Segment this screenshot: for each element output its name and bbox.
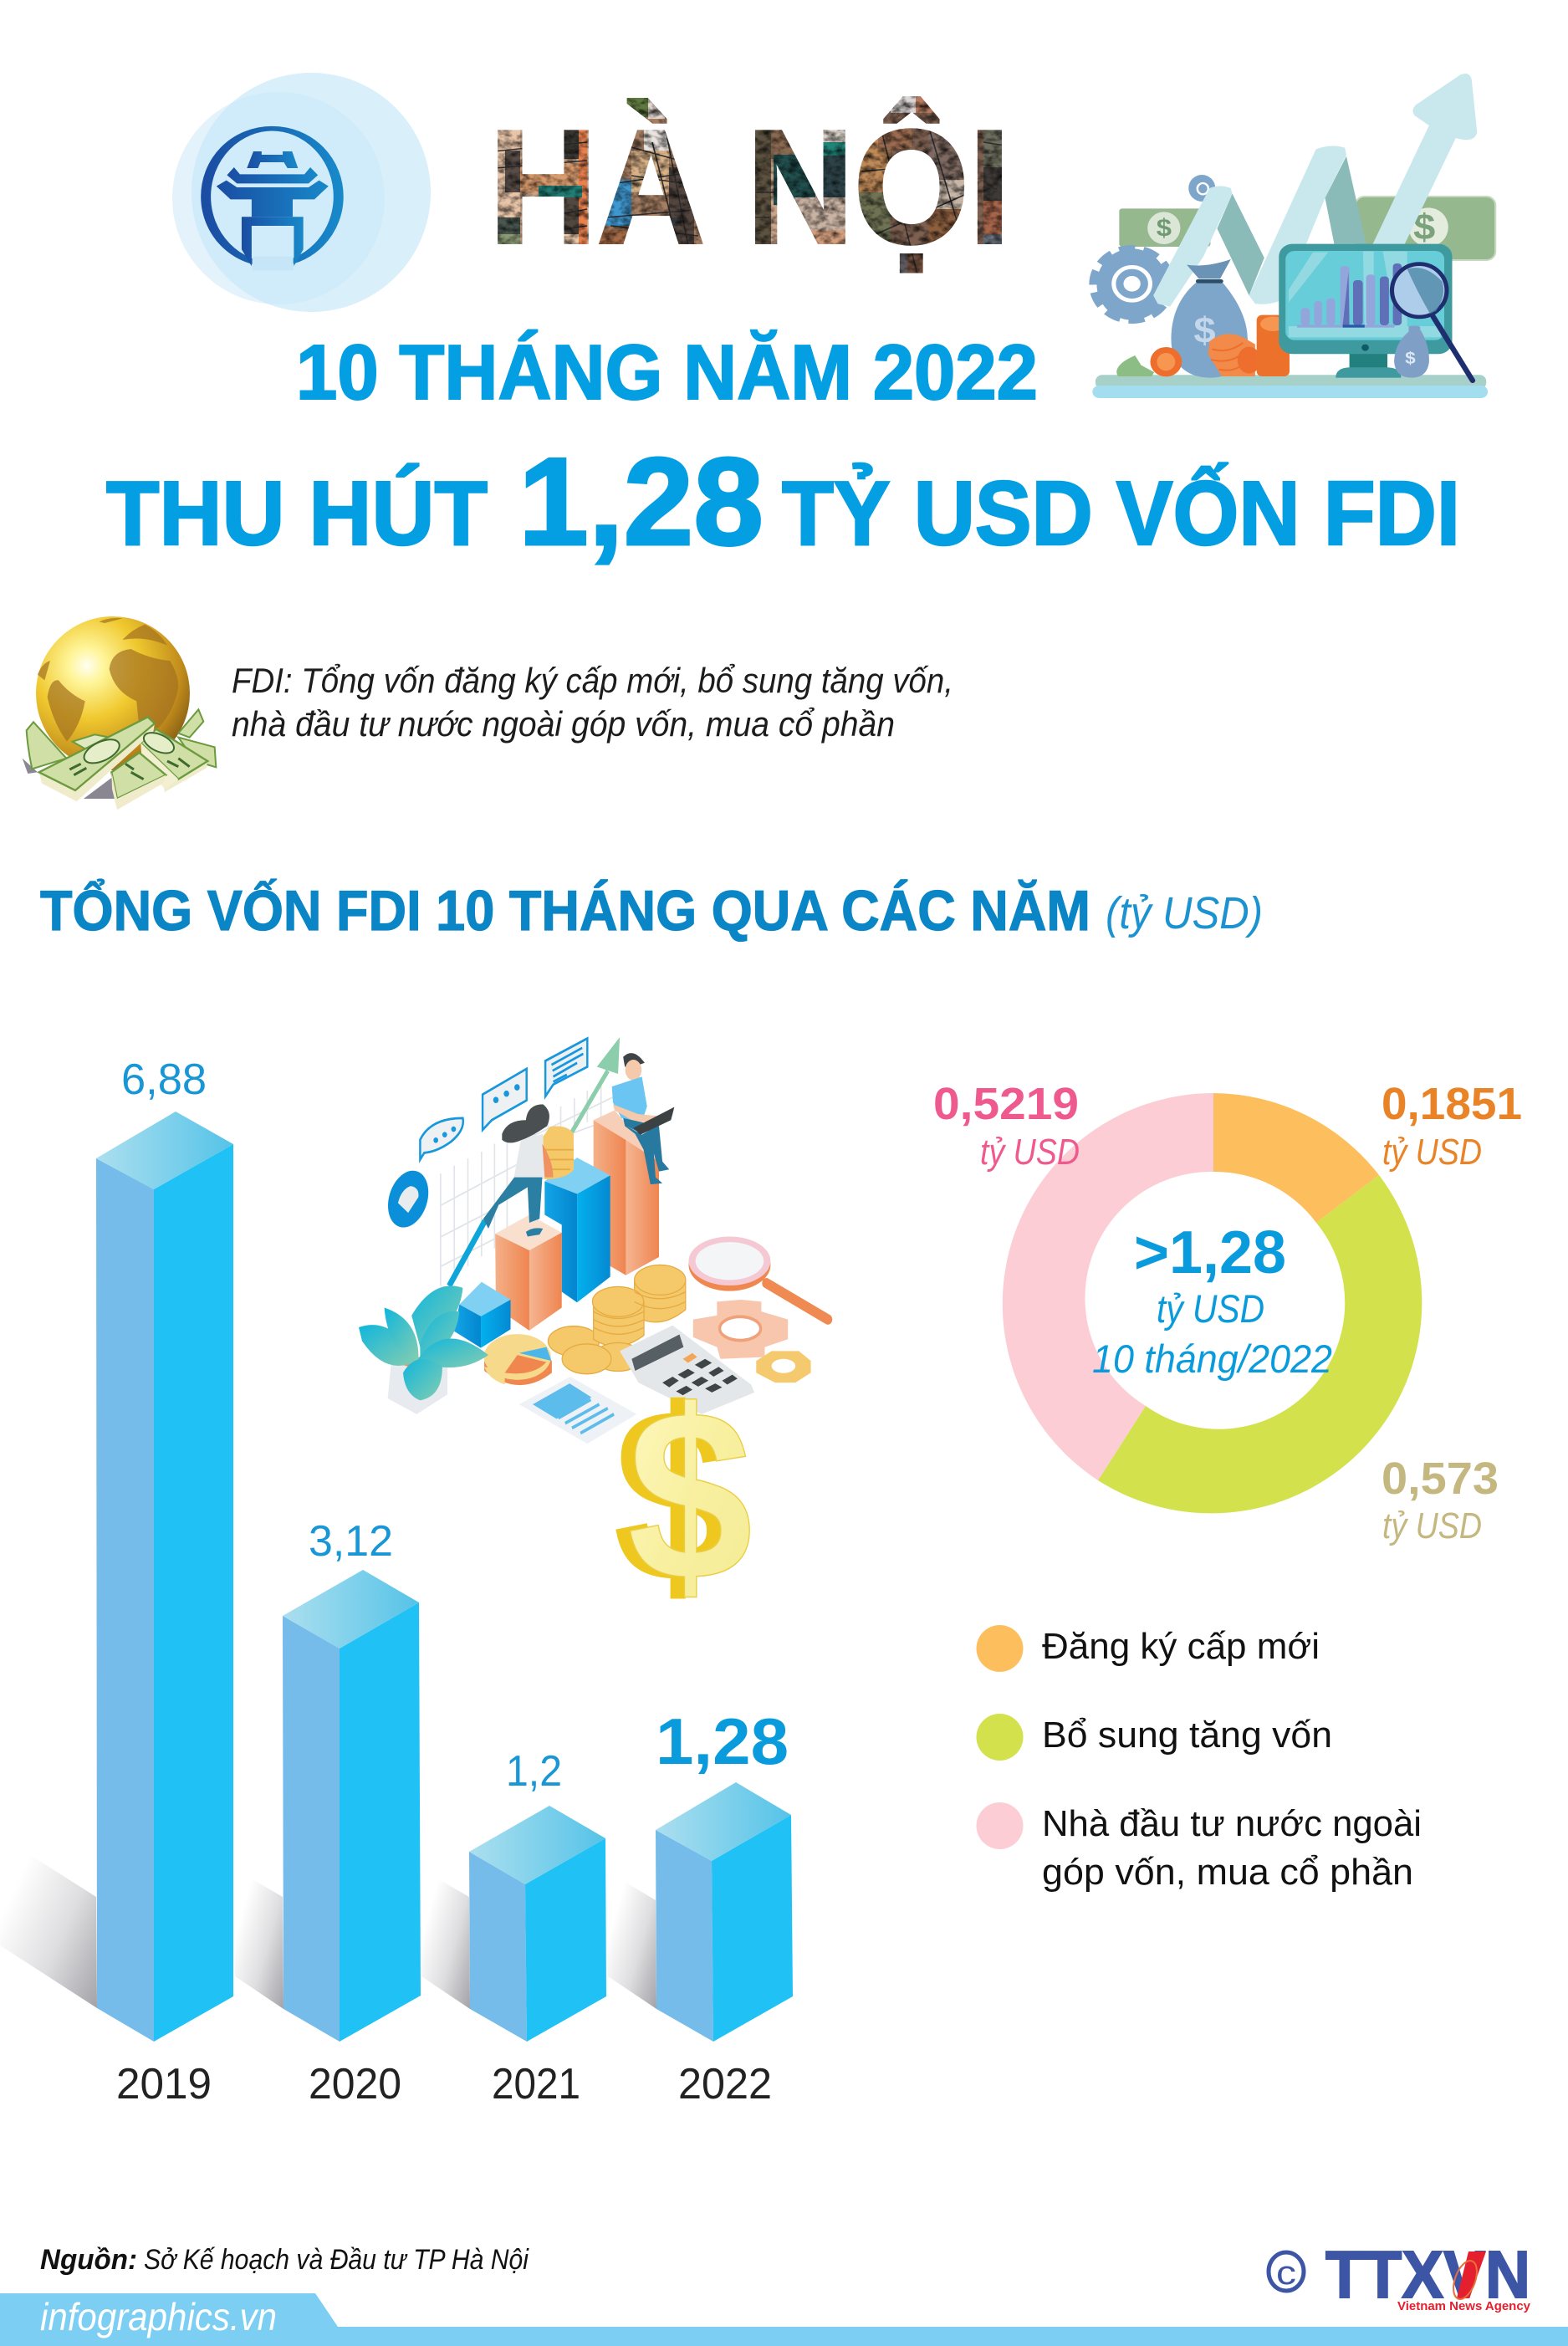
icon: gold dollar sign: $ [627, 1360, 753, 1631]
bar value labels: 1,2 [506, 1747, 562, 1796]
heading: HÀ NỘI with photo texture: HÀ [489, 96, 705, 277]
icon: gold dollar sign: $ [615, 1360, 740, 1631]
website: infographics.vn [40, 2295, 277, 2338]
source note: Nguồn: [40, 2244, 137, 2276]
label: pink value: tỷ USD [980, 1132, 1080, 1173]
title: thu hút 1,28 tỷ USD vốn FDI: TỶ USD VỐN FDI [782, 462, 1460, 565]
legend: capital contribution [977, 1802, 1422, 1893]
logo: Hanoi emblem [172, 73, 431, 312]
illustration: growth chart, money and monitor: $ [1157, 214, 1172, 242]
bar value labels: 1,28 [656, 1705, 789, 1778]
segment: capital contribution [1003, 1093, 1213, 1480]
logo: TTXVN: Vietnam News Agency [1397, 2299, 1531, 2313]
heading: HÀ NỘI with photo texture [489, 96, 1010, 277]
illustration: growth chart, money and monitor: $ [1405, 348, 1416, 368]
bar 2020 [283, 1570, 421, 2042]
title: 10 tháng năm 2022: 10 THÁNG NĂM 2022 [296, 329, 1038, 416]
bar chart: FDI by year [0, 1055, 793, 2108]
footer banner [0, 2293, 1568, 2346]
label: orange value: tỷ USD [1382, 1132, 1482, 1173]
title: thu hút 1,28 tỷ USD vốn FDI: 1,28 [518, 432, 764, 571]
text: FDI definition [232, 661, 953, 744]
legend: capital contribution: Nhà đầu tư nước ngoài [1042, 1803, 1422, 1844]
label: orange value [1382, 1079, 1522, 1173]
bar shadows [0, 1836, 656, 2009]
year labels: 2022 [678, 2060, 772, 2108]
donut centre total [1092, 1219, 1332, 1381]
bar value labels: 3,12 [309, 1517, 393, 1566]
text: FDI definition: nhà đầu tư nước ngoài góp vốn, mua cổ phần [232, 704, 895, 744]
legend: capital increase: Bổ sung tăng vốn [1042, 1715, 1332, 1756]
legend: capital contribution: góp vốn, mua cổ phần [1042, 1852, 1413, 1893]
label: orange value: 0,1851 [1382, 1079, 1522, 1129]
illustration: growth chart, money and monitor: $ [1413, 207, 1435, 248]
legend: new registration: Đăng ký cấp mới [1042, 1626, 1320, 1667]
heading: HÀ NỘI with photo texture: NỘI [747, 96, 1010, 277]
label: green value: tỷ USD [1382, 1505, 1482, 1546]
source note: Sở Kế hoạch và Đầu tư TP Hà Nội [144, 2244, 529, 2276]
title: thu hút 1,28 tỷ USD vốn FDI [106, 432, 1460, 571]
legend [977, 1625, 1422, 1893]
segment: capital increase [1098, 1175, 1422, 1513]
bar value labels: 6,88 [121, 1055, 207, 1104]
label: green value [1382, 1454, 1499, 1546]
illustration: isometric business scene [359, 1037, 828, 1444]
logo: TTXVN: c [1276, 2255, 1296, 2292]
heading: bar chart section: TỔNG VỐN FDI 10 THÁNG QUA CÁC NĂM [40, 878, 1090, 943]
year labels: 2020 [309, 2060, 401, 2108]
donut chart: FDI breakdown [1003, 1093, 1422, 1513]
heading: bar chart section: (tỷ USD) [1106, 888, 1263, 938]
title: thu hút 1,28 tỷ USD vốn FDI: THU HÚT [106, 463, 488, 565]
year labels: 2021 [492, 2060, 580, 2108]
segment: new registration [1213, 1093, 1379, 1223]
bar 2021 [469, 1806, 606, 2042]
donut centre total: tỷ USD [1157, 1286, 1264, 1331]
year labels: 2019 [116, 2060, 212, 2108]
label: pink value [933, 1079, 1080, 1173]
label: green value: 0,573 [1382, 1454, 1499, 1504]
label: pink value: 0,5219 [933, 1079, 1079, 1129]
donut centre total: 10 tháng/2022 [1092, 1337, 1332, 1381]
illustration: growth chart, money and monitor: $ [1193, 310, 1216, 351]
bar 2022 [656, 1782, 793, 2042]
bar value labels [121, 1055, 789, 1796]
donut centre total: >1,28 [1134, 1219, 1286, 1286]
bar 2019 [96, 1112, 233, 2042]
year labels [116, 2060, 772, 2108]
logo: TTXVN: TTXVN [1325, 2237, 1530, 2312]
icon: golden globe on money [23, 616, 216, 810]
text: FDI definition: FDI: Tổng vốn đăng ký cấp mới, bổ sung tăng vốn, [232, 661, 953, 700]
illustration: growth chart, money and monitor [1092, 74, 1495, 398]
